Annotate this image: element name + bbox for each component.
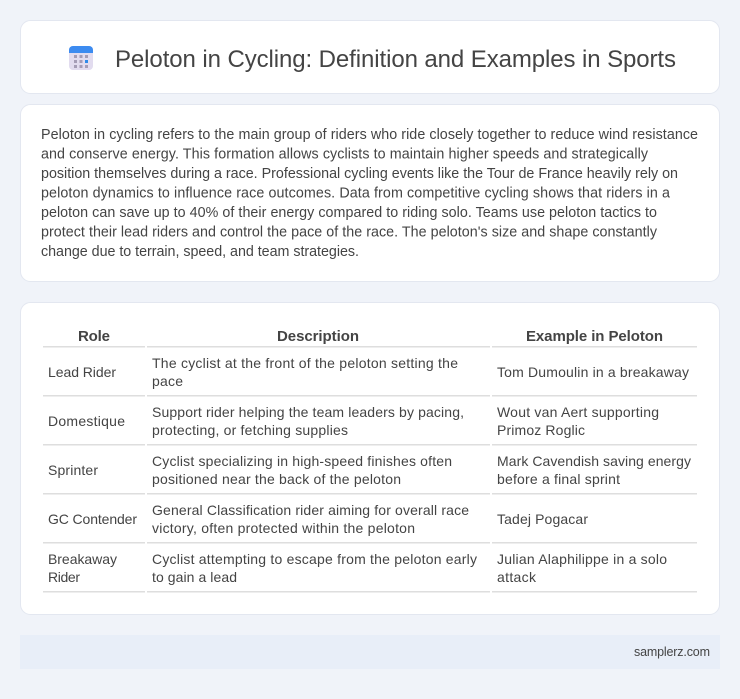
text block: intro: change due to terrain, speed, and team strategies. — [41, 244, 359, 260]
panel: intro paragraph — [20, 104, 720, 282]
row: lead rider — [48, 355, 689, 389]
row: breakaway rider: to gain a lead — [152, 569, 237, 585]
row: sprinter — [48, 453, 691, 487]
row: domestique: Support rider helping the team leaders by pacing, — [152, 404, 464, 420]
text block: intro: peloton can save up to 40% of their energy compared to riding solo. Teams use peloton tactics to — [41, 205, 657, 221]
table header: Example in Peloton — [526, 328, 663, 345]
row: gc contender — [48, 502, 588, 536]
icon: calendar — [69, 46, 93, 70]
row: lead rider: Tom Dumoulin in a breakaway — [497, 364, 689, 380]
row: breakaway rider: Julian Alaphilippe in a solo — [497, 551, 667, 567]
row: gc contender: GC Contender — [48, 511, 137, 527]
row: domestique: Domestique — [48, 413, 125, 429]
table header: Role — [78, 328, 110, 345]
row: domestique: Primoz Roglic — [497, 422, 585, 438]
row: sprinter: positioned near the back of the peloton — [152, 471, 401, 487]
text block: intro: protect their lead riders and control the pace of the race. The peloton's size and shape constantly — [41, 224, 658, 240]
footer bar — [20, 635, 720, 669]
row: breakaway rider: attack — [497, 569, 537, 585]
row: lead rider: The cyclist at the front of the peloton setting the — [152, 355, 458, 371]
row: breakaway rider: Rider — [48, 569, 80, 585]
text block: intro — [41, 127, 698, 260]
panel: roles table — [20, 302, 720, 614]
text block: intro: and conserve energy. This formation allows cyclists to maintain higher speeds and strategically — [41, 146, 649, 162]
row: breakaway rider — [48, 551, 667, 585]
row: gc contender: Tadej Pogacar — [497, 511, 588, 527]
row: gc contender: victory, often protected within the peloton — [152, 520, 415, 536]
row: sprinter: Mark Cavendish saving energy — [497, 453, 691, 469]
row: domestique: protecting, or fetching supplies — [152, 422, 348, 438]
footer text: samplerz.com — [634, 645, 710, 659]
row: lead rider: pace — [152, 373, 183, 389]
row: domestique: Wout van Aert supporting — [497, 404, 659, 420]
table header — [78, 328, 663, 345]
text block: intro: position themselves during a race. Professional cycling events like the Tour de France heavily rely on — [41, 166, 678, 182]
row: domestique — [48, 404, 659, 438]
header panel — [20, 20, 720, 94]
row: breakaway rider: Cyclist attempting to escape from the peloton early — [152, 551, 477, 567]
row: sprinter: Cyclist specializing in high-speed finishes often — [152, 453, 452, 469]
text block: intro: peloton dynamics to influence race outcomes. Data from competitive cycling shows that riders in a — [41, 186, 670, 202]
row: gc contender: General Classification rider aiming for overall race — [152, 502, 469, 518]
row: lead rider: Lead Rider — [48, 364, 116, 380]
row: sprinter: before a final sprint — [497, 471, 620, 487]
text block: intro: Peloton in cycling refers to the main group of riders who ride closely together to reduce wind resistance — [41, 127, 698, 143]
title: Peloton in Cycling: Definition and Examples in Sports — [115, 46, 676, 73]
table header: Description — [277, 328, 359, 345]
row: sprinter: Sprinter — [48, 462, 98, 478]
row: breakaway rider: Breakaway — [48, 551, 117, 567]
